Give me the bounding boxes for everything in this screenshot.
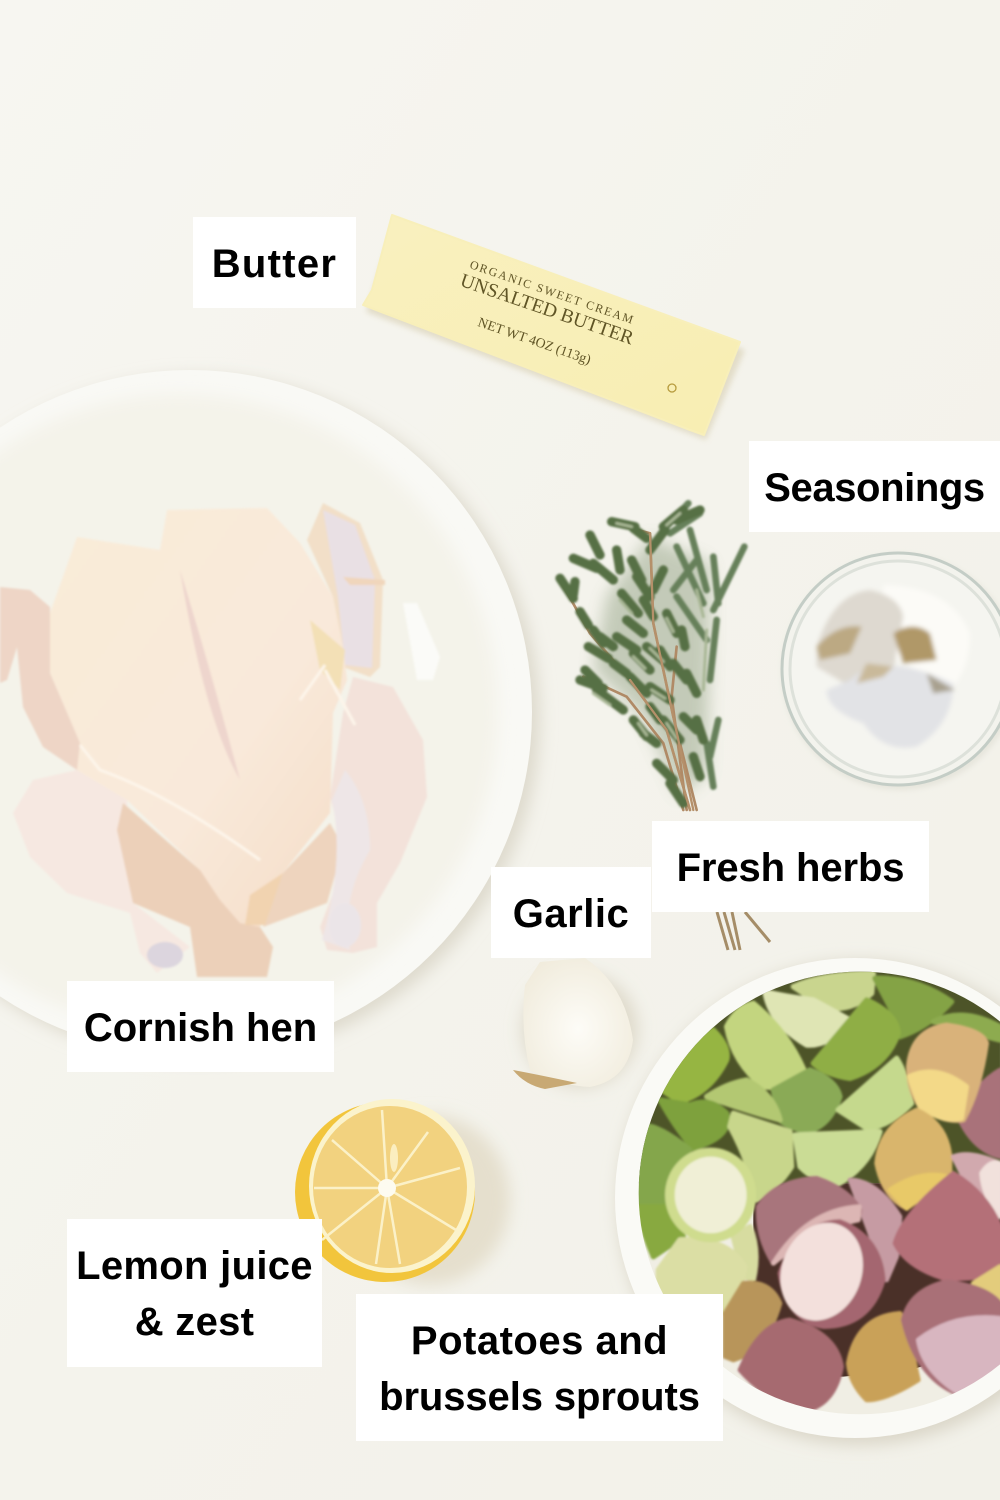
label: Garlic: Garlic <box>513 892 629 936</box>
label: Garlic <box>491 867 651 958</box>
label: Potatoes and brussels sprouts: brussels sprouts <box>379 1374 700 1418</box>
label: Cornish hen <box>67 981 334 1072</box>
breast <box>50 508 347 927</box>
hen <box>0 503 427 977</box>
label: Butter: Butter <box>212 242 337 286</box>
left wing <box>0 587 93 770</box>
label: Lemon juice and zest: Lemon juice <box>76 1244 313 1288</box>
left thigh <box>13 770 190 973</box>
garlic <box>513 958 638 1089</box>
label: Seasonings <box>749 441 1000 532</box>
butter <box>363 215 745 440</box>
label: Fresh herbs: Fresh herbs <box>677 846 904 890</box>
right leg <box>320 677 427 953</box>
label: Lemon juice and zest <box>67 1219 322 1367</box>
potatoes <box>725 1025 1000 1412</box>
butter wrapper text: NET WT 4OZ (113g) <box>476 314 593 368</box>
label: Potatoes and brussels sprouts <box>356 1294 723 1441</box>
label: Potatoes and brussels sprouts: Potatoes and <box>411 1318 668 1362</box>
label: Butter <box>193 217 356 308</box>
herb stem ends <box>717 912 770 950</box>
bowl of potatoes and brussels sprouts <box>615 958 1000 1445</box>
label: Lemon juice and zest: & zest <box>135 1300 254 1344</box>
cavity left <box>117 803 273 977</box>
lemon <box>295 1099 510 1285</box>
back wing <box>307 503 385 677</box>
herbs <box>560 503 744 810</box>
sprouts <box>637 973 1000 1313</box>
label: Seasonings: Seasonings <box>764 466 985 510</box>
seasonings bowl <box>782 553 1000 790</box>
plate <box>0 370 540 1060</box>
label: Cornish hen: Cornish hen <box>84 1006 317 1050</box>
butter wrapper text: ORGANIC SWEET CREAM <box>468 257 637 327</box>
butter wrapper text: UNSALTED BUTTER <box>457 270 636 349</box>
label: Fresh herbs <box>652 821 929 912</box>
cavity right <box>263 823 343 927</box>
